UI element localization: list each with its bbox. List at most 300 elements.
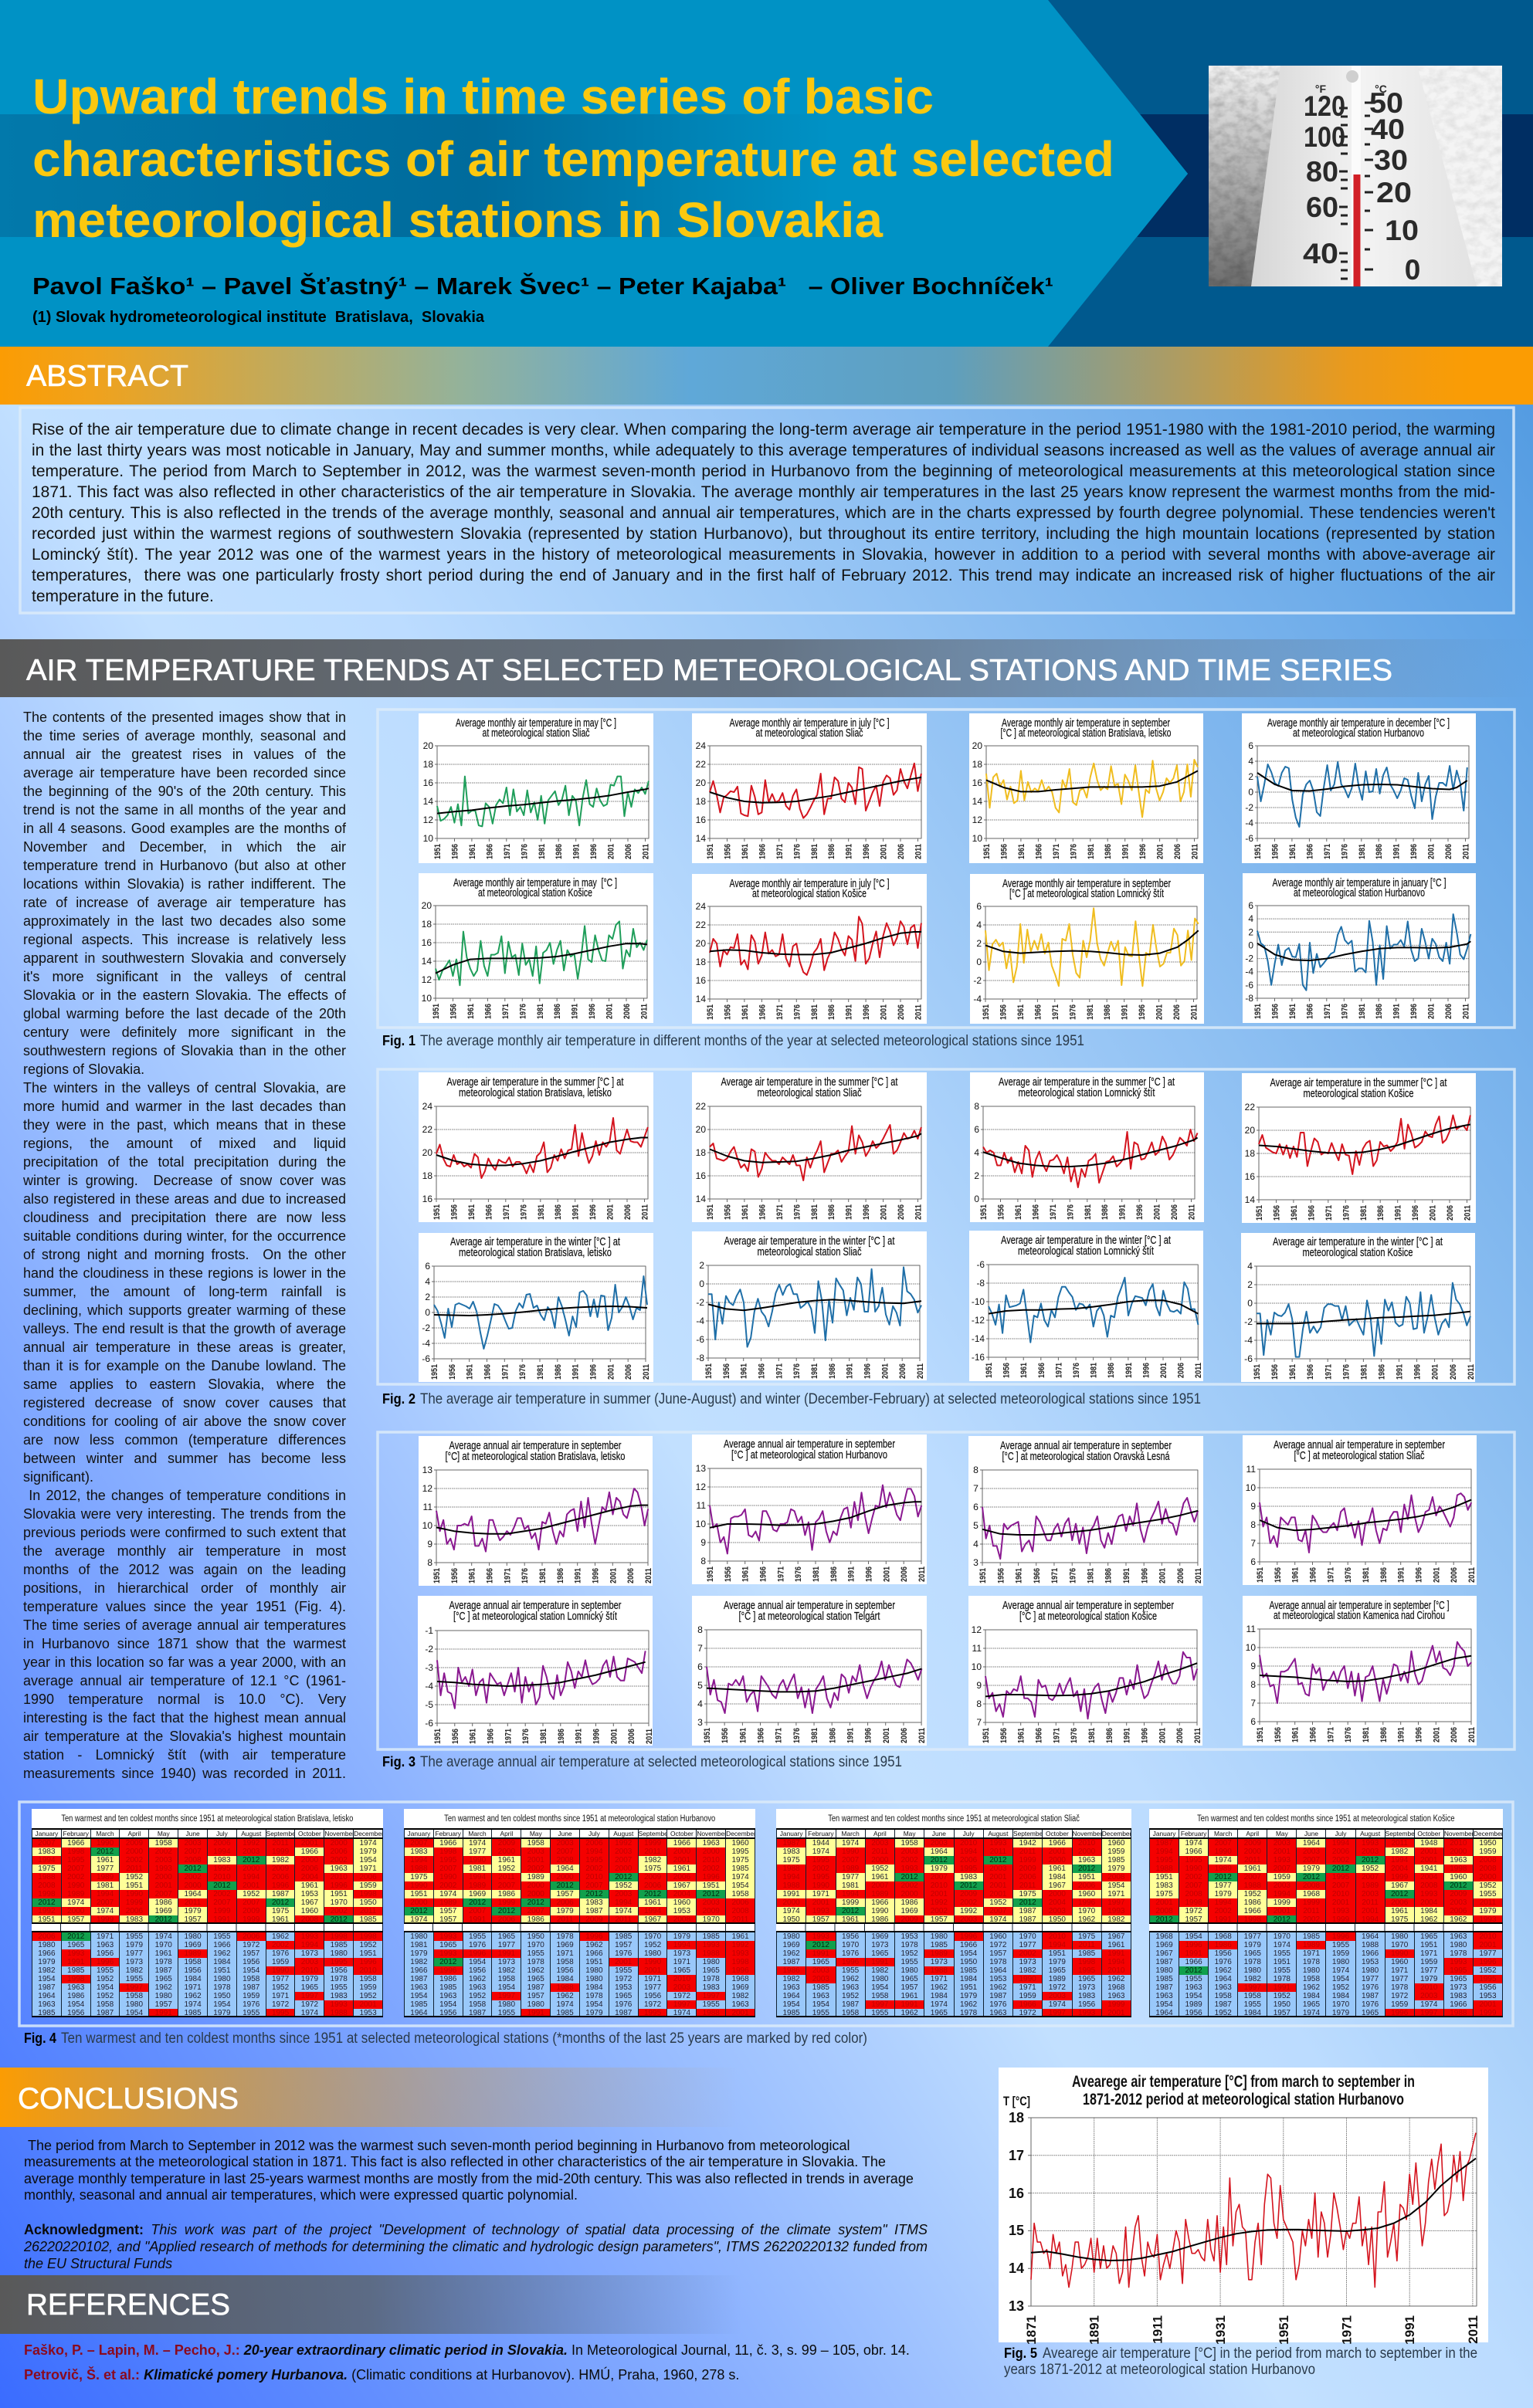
table: Hurbanovo: 1995 (439, 1856, 456, 1864)
table: Hurbanovo: 2008 (731, 1907, 749, 1915)
table: Kosice: 2004 (1391, 1864, 1408, 1873)
chart: annual Oravska Lesna: 3 (973, 1557, 978, 1568)
table: Bratislava, letisko: 1980 (155, 1992, 172, 2000)
table: Kosice: 1959 (1391, 2000, 1408, 2009)
table: Kosice: 1979 (1479, 1907, 1497, 1915)
table: Kosice: 1958 (1303, 1975, 1320, 1983)
table: Kosice: 1955 (1332, 1941, 1349, 1949)
table: Bratislava, letisko: 1955 (97, 1966, 114, 1975)
left column text: the average monthly air temperature in most (23, 1543, 346, 1559)
table: Sliac: 1958 (900, 1839, 918, 1847)
table: Kosice: February (1181, 1830, 1206, 1837)
table: Sliac: 2003 (871, 1839, 888, 1847)
chart: January Hurbanovo: at meteorological station Hurbanovo (1294, 886, 1425, 899)
table: Hurbanovo: 2000 (615, 1864, 632, 1873)
table: Sliac: 1991 (812, 1949, 829, 1958)
table: Kosice: 1954 (1185, 1932, 1202, 1941)
table: Hurbanovo: 2009 (703, 1907, 720, 1915)
chart: September Lomnicky stit: 0 (976, 957, 982, 967)
chart: winter Sliac: -4 (696, 1316, 704, 1326)
table: Bratislava, letisko: 2007 (67, 1864, 84, 1873)
table: Sliac: 2003 (931, 1839, 948, 1847)
table: Hurbanovo: 1998 (439, 1847, 456, 1856)
chart: January Hurbanovo: 6 (1248, 900, 1253, 911)
table: Kosice: 1978 (1303, 1958, 1320, 1966)
table: Kosice: 1970 (1332, 2000, 1349, 2009)
table: Hurbanovo: 1985 (410, 2000, 428, 2009)
table: Kosice: 2012 (1362, 1856, 1379, 1864)
table: Bratislava, letisko: 1956 (184, 1966, 202, 1975)
table: Bratislava, letisko: 1956 (67, 2009, 84, 2017)
header background (0, 0, 1533, 347)
table: Bratislava, letisko: 1954 (359, 1856, 377, 1864)
table: Kosice: 1978 (1244, 1958, 1261, 1966)
chart: annual Sliac: [°C ] at meteorological station Sliač (1294, 1449, 1425, 1462)
table: Hurbanovo: June (558, 1830, 572, 1837)
table: Hurbanovo: 1993 (731, 1949, 749, 1958)
table: Bratislava, letisko: 1953 (359, 2009, 377, 2017)
table: Sliac: 1966 (1019, 2000, 1036, 2009)
table: Sliac: 1985 (931, 1941, 948, 1949)
table: Sliac: 1976 (989, 2000, 1007, 2009)
table: Bratislava, letisko: 1977 (97, 1864, 114, 1873)
table: Kosice: 1965 (1244, 1949, 1261, 1958)
chart: annual Kosice: [°C ] at meteorological station Košice (1019, 1610, 1157, 1623)
table: Kosice: 1993 (1332, 1907, 1349, 1915)
table: Bratislava, letisko: 1964 (38, 1992, 56, 2000)
left column text: global warming before the last decade of the 20th (23, 1006, 346, 1021)
chart: May Kosice: 20 (422, 900, 432, 911)
chart: annual Oravska Lesna: [°C ] at meteorological station Oravská Lesná (1002, 1450, 1170, 1463)
chart: July Kosice (692, 874, 927, 1024)
table: Sliac: November (1072, 1830, 1102, 1837)
table: Kosice: October (1417, 1830, 1440, 1837)
abstract text: Lomincký štít). The year 2012 was one of the warmest years in the history of meteorological measurements in Slovakia, however in addition to a period with several months with above-average air (32, 546, 1495, 564)
table: Bratislava, letisko: May (158, 1830, 170, 1837)
table: Sliac: 1955 (871, 2009, 888, 2017)
table: Hurbanovo: 1957 (556, 1890, 574, 1898)
table: Sliac: 1990 (812, 1881, 829, 1890)
table: Hurbanovo: 1991 (469, 1915, 486, 1924)
chart: winter Sliac: -8 (696, 1353, 704, 1363)
table: Hurbanovo: 2011 (498, 1873, 515, 1881)
table: Hurbanovo: 1979 (556, 1907, 574, 1915)
table: Hurbanovo: October (670, 1830, 694, 1837)
table: Kosice: May (1276, 1830, 1288, 1837)
table: Hurbanovo: 1965 (527, 1975, 544, 1983)
table: Kosice: 2002 (1332, 1856, 1349, 1864)
table: Bratislava, letisko: 2012 (155, 1915, 172, 1924)
table: Hurbanovo: 2012 (585, 1890, 603, 1898)
table: Kosice: 1975 (1391, 1915, 1408, 1924)
left column text: regional aspects. This increase is relatively less (23, 932, 346, 947)
table: Kosice: 2010 (1420, 1983, 1437, 1992)
table: Bratislava, letisko: 2006 (301, 1864, 318, 1873)
table: Hurbanovo: 1989 (527, 1873, 544, 1881)
table: Hurbanovo: 1955 (498, 2009, 515, 2017)
table: Bratislava, letisko: 1955 (126, 1932, 143, 1941)
table: Bratislava, letisko: 1991 (155, 2009, 172, 2017)
table: Kosice: 1952 (1215, 2009, 1232, 2017)
chart: December Hurbanovo: 0 (1248, 787, 1253, 798)
table: Kosice: 2007 (1215, 1839, 1232, 1847)
abstract text: temperature in the future. (32, 588, 214, 605)
table: Bratislava, letisko: 1979 (38, 1958, 56, 1966)
chart: summer Lomnicky stit (970, 1072, 1204, 1222)
table: Kosice: 1982 (1391, 1847, 1408, 1856)
table: Hurbanovo: 1972 (673, 1992, 690, 2000)
table: Sliac: 1962 (931, 1983, 948, 1992)
table: Sliac: 1978 (900, 1941, 918, 1949)
chart: annual Bratislava: 12 (422, 1483, 432, 1494)
chart: summer Bratislava (419, 1072, 653, 1222)
chart: May Kosice: 12 (422, 974, 432, 985)
chart: winter Bratislava: -2 (422, 1323, 430, 1333)
table: Bratislava, letisko: 2006 (242, 1932, 259, 1941)
table: Kosice: 1983 (1450, 1992, 1467, 2000)
table: Kosice: November (1444, 1830, 1474, 1837)
chart: May Sliac: 14 (423, 796, 433, 807)
chart: September Bratislava: 18 (972, 759, 982, 770)
table: Bratislava, letisko: 1951 (38, 1915, 56, 1924)
table: Bratislava, letisko: 1974 (67, 1898, 84, 1907)
table: Hurbanovo: 1956 (644, 1992, 661, 2000)
table: Bratislava, letisko: 1974 (155, 1932, 172, 1941)
chart: summer Sliac: 22 (696, 1101, 706, 1112)
table: Sliac: 1991 (871, 1958, 888, 1966)
table: Kosice: 1978 (1391, 1983, 1408, 1992)
table: Bratislava, letisko: 1985 (184, 2009, 202, 2017)
table: Bratislava, letisko: 1999 (97, 1915, 114, 1924)
photo: thermometer: 120 (1304, 90, 1345, 122)
table: Hurbanovo: 1988 (703, 1949, 720, 1958)
table: Bratislava, letisko: 1957 (184, 1915, 202, 1924)
table: Hurbanovo: 1970 (527, 1941, 544, 1949)
table: Sliac: 1996 (1078, 1898, 1095, 1907)
table: Sliac: 1952 (900, 1949, 918, 1958)
table: Bratislava, letisko: 1950 (213, 1992, 231, 2000)
table: Kosice: 1948 (1420, 1839, 1437, 1847)
table: Hurbanovo: 1980 (585, 1966, 603, 1975)
table: Sliac: 1994 (842, 1890, 859, 1898)
caption: figure 4: Ten warmest and ten coldest months since 1951 at selected meteorological stations (*months of the last 25 years are marked by red color) (61, 2030, 867, 2047)
table: Bratislava, letisko: June (185, 1830, 200, 1837)
table: Bratislava, letisko: 1952 (97, 1975, 114, 1983)
table: Kosice: 1990 (1215, 1847, 1232, 1856)
table: Kosice: 1977 (1479, 1949, 1497, 1958)
table: Kosice: 1994 (1362, 1915, 1379, 1924)
table: Kosice: 1982 (1244, 1975, 1261, 1983)
table: Kosice: 2002 (1185, 1873, 1202, 1881)
table: Bratislava, letisko: 2001 (155, 1881, 172, 1890)
caption: figure 4: Fig. 4 (24, 2030, 56, 2046)
table: Kosice: 2012 (1185, 1966, 1202, 1975)
table: Hurbanovo: 1963 (731, 2000, 749, 2009)
table: Sliac: 1952 (989, 1898, 1007, 1907)
left column text: Slovakia were very interesting. The trends from the (23, 1506, 346, 1522)
chart: summer Lomnicky stit: 8 (974, 1101, 979, 1112)
table: Sliac: 2006 (1019, 1873, 1036, 1881)
table: Kosice: 1989 (1303, 1941, 1320, 1949)
table: Kosice: 1998 (1244, 1915, 1261, 1924)
table: Kosice: 1991 (1274, 1983, 1291, 1992)
table: Sliac: 1993 (812, 1907, 829, 1915)
table: Bratislava, letisko: 2008 (184, 1856, 202, 1864)
table: Sliac: 1995 (812, 1856, 829, 1864)
table: Hurbanovo: 1961 (673, 1864, 690, 1873)
table: Hurbanovo: 1956 (439, 2009, 456, 2017)
table: Kosice: 1995 (1450, 1966, 1467, 1975)
title: meteorological stations in Slovakia (32, 192, 883, 248)
table: Sliac: 2000 (783, 1898, 800, 1907)
table: Hurbanovo: 1958 (556, 1958, 574, 1966)
table: Kosice: 1958 (1244, 1992, 1261, 2000)
chart: May Kosice: 10 (422, 993, 432, 1004)
table: Sliac: 1944 (812, 1839, 829, 1847)
table: Sliac: 1980 (783, 1932, 800, 1941)
abstract text: Rise of the air temperature due to climate change in recent decades is very clear. When comparing the long-term average air temperature in the period 1951-1980 with the 1981-2010 period, the warming (32, 421, 1495, 439)
table: Bratislava, letisko: 1996 (272, 1881, 289, 1890)
table: Sliac: 2001 (989, 1890, 1007, 1898)
table: Kosice: 1984 (1303, 1992, 1320, 2000)
table: Bratislava, letisko: 1991 (67, 1958, 84, 1966)
table: Bratislava, letisko: 1990 (67, 1881, 84, 1890)
table: Bratislava, letisko: 2012 (97, 1847, 114, 1856)
table: Kosice: 1980 (1362, 1966, 1379, 1975)
chart: annual Lomnicky stit: -3 (425, 1662, 433, 1673)
table: Bratislava, letisko: 1974 (359, 1839, 377, 1847)
table: Kosice: 1960 (1450, 1873, 1467, 1881)
table: Kosice: 1989 (1185, 2000, 1202, 2009)
table: Sliac: 1991 (783, 1890, 800, 1898)
table: Kosice: 2007 (1244, 1873, 1261, 1881)
table: Bratislava, letisko: 1996 (359, 1958, 377, 1966)
table: Kosice: 2001 (1420, 1847, 1437, 1856)
table: Kosice: 1956 (1215, 1949, 1232, 1958)
photo: thermometer: 60 (1306, 191, 1338, 223)
table: Kosice: 1959 (1332, 1949, 1349, 1958)
left column text: winter is growing. Decrease of snow cover was (23, 1173, 346, 1188)
table: Kosice: 1975 (1155, 1890, 1173, 1898)
table: Sliac: 2000 (1078, 1847, 1095, 1856)
left column text: the beginning of the 90's of the 20th century. This (23, 784, 346, 799)
table: Hurbanovo: 1961 (644, 1898, 661, 1907)
table: Bratislava, letisko: 1982 (126, 1966, 143, 1975)
table: Kosice: 1955 (1185, 1975, 1202, 1983)
table: Hurbanovo: 1957 (527, 1992, 544, 2000)
table: Sliac: 1973 (1078, 1983, 1095, 1992)
table: Bratislava, letisko: 1966 (38, 1949, 56, 1958)
chart: July Sliac: 16 (696, 815, 706, 825)
table: Bratislava, letisko: 1985 (67, 1966, 84, 1975)
chart: summer Bratislava: meteorological station Bratislava, letisko (459, 1086, 612, 1099)
table: Hurbanovo: 1963 (439, 1992, 456, 2000)
chart: May Sliac: 12 (423, 815, 433, 825)
table: Sliac: 1942 (1019, 1839, 1036, 1847)
table: Kosice: 1987 (1155, 1839, 1173, 1847)
table: Hurbanovo: 2010 (673, 1975, 690, 1983)
table: Bratislava, letisko: 2000 (184, 1881, 202, 1890)
table: Hurbanovo: 1986 (527, 1915, 544, 1924)
table: Hurbanovo: 1979 (585, 2009, 603, 2017)
left column text: century were definitely more significant in the (23, 1025, 346, 1040)
table: Sliac: 1963 (783, 1983, 800, 1992)
table: Sliac: 1954 (812, 2000, 829, 2009)
table: Bratislava, letisko: 1999 (213, 1907, 231, 1915)
chart: March-September Hurbanovo 1871-2012: 16 (1009, 2186, 1024, 2201)
table: Hurbanovo: 2003 (527, 1847, 544, 1856)
chart: summer Bratislava: 22 (422, 1124, 432, 1135)
table: Bratislava, letisko: 1963 (97, 1941, 114, 1949)
table: Sliac: 1984 (1049, 1873, 1066, 1881)
table: Hurbanovo: 1997 (703, 1992, 720, 2000)
left column text: The contents of the presented images show that in (23, 710, 346, 725)
table: Hurbanovo: 1979 (410, 1949, 428, 1958)
table: Sliac: 2003 (960, 1915, 977, 1924)
table: Sliac: 1993 (900, 1864, 918, 1873)
table: Sliac: 1963 (1078, 1856, 1095, 1864)
chart: winter Sliac: Average air temperature in the winter [°C ] at (724, 1234, 895, 1248)
table: Sliac: 2001 (1107, 2009, 1124, 2017)
chart: January Hurbanovo: -8 (1245, 993, 1253, 1004)
table: Sliac: 1986 (871, 1915, 888, 1924)
table: Bratislava, letisko: 2001 (359, 2000, 377, 2009)
table: Hurbanovo: 1954 (731, 1881, 749, 1890)
chart: September Bratislava (969, 713, 1203, 863)
table: Bratislava, letisko: 1970 (155, 1941, 172, 1949)
table: Kosice: 1964 (1303, 1839, 1320, 1847)
table: Sliac: 2009 (960, 1890, 977, 1898)
table: Sliac: 1983 (960, 1873, 977, 1881)
chart: annual Kamenica nad Cirohou: 7 (1250, 1698, 1256, 1709)
table: Sliac: 1999 (1019, 1856, 1036, 1864)
table: Kosice: July (1335, 1830, 1346, 1837)
chart: July Kosice: at meteorological station Košice (752, 887, 867, 900)
table: Hurbanovo: 2009 (585, 1915, 603, 1924)
table: Bratislava, letisko: 2011 (272, 1839, 289, 1847)
table: Hurbanovo: 1988 (703, 2009, 720, 2017)
chart: summer Kosice: 16 (1245, 1171, 1255, 1182)
table: Hurbanovo: 1985 (439, 1983, 456, 1992)
photo: thermometer: 20 (1376, 177, 1412, 208)
table: Sliac: 1987 (1019, 1915, 1036, 1924)
table: Bratislava, letisko: 2009 (242, 1907, 259, 1915)
chart: annual Kamenica nad Cirohou: Average annual air temperature in september [°C ] (1270, 1599, 1449, 1612)
table: Sliac: 2012 (812, 1941, 829, 1949)
title: characteristics of air temperature at selected (32, 131, 1114, 187)
table: Kosice: 1968 (1303, 1890, 1320, 1898)
caption: figure 1: Fig. 1 (382, 1033, 415, 1048)
table: Kosice: 2006 (1391, 1898, 1408, 1907)
chart: annual Hurbanovo: 13 (696, 1463, 706, 1474)
table: Sliac: 1954 (1107, 1881, 1124, 1890)
table: Kosice: 1974 (1274, 1941, 1291, 1949)
table: Kosice: 1966 (1362, 1949, 1379, 1958)
photo: thermometer: 30 (1374, 144, 1408, 176)
table: Bratislava, letisko: 1986 (155, 1898, 172, 1907)
chart: September Bratislava: 14 (972, 796, 982, 807)
table: Hurbanovo: 1996 (469, 1949, 486, 1958)
table: Sliac: 1962 (989, 1983, 1007, 1992)
chart: winter Sliac (692, 1231, 927, 1380)
table: Kosice: 1999 (1332, 1915, 1349, 1924)
table: Hurbanovo: 1965 (703, 1966, 720, 1975)
table: Kosice: 2001 (1155, 1898, 1173, 1907)
left column text: In 2012, the changes of temperature conditions in (29, 1488, 346, 1503)
table: Sliac: 1958 (871, 1992, 888, 2000)
panel: figure 3 (378, 1432, 1514, 1749)
table: Kosice: 2001 (1362, 1907, 1379, 1915)
table: Sliac: 1978 (989, 1958, 1007, 1966)
table: Hurbanovo: 2012 (410, 1907, 428, 1915)
table: Bratislava, letisko: 1959 (359, 1881, 377, 1890)
table: Sliac: 1966 (960, 1941, 977, 1949)
table: Bratislava, letisko: 1993 (155, 1864, 172, 1873)
table: Kosice: 1955 (1479, 1890, 1497, 1898)
table: Sliac: 1977 (842, 1873, 859, 1881)
table: Bratislava, letisko: 1979 (126, 1941, 143, 1949)
chart: annual Kosice: 10 (972, 1661, 982, 1672)
left column text: year in this location so far was a year 2000, with an (23, 1654, 346, 1670)
chart: annual Hurbanovo: 12 (696, 1482, 706, 1492)
table: Kosice: 2003 (1303, 1847, 1320, 1856)
table: Sliac: 1994 (1107, 1958, 1124, 1966)
table: Bratislava, letisko: 1954 (242, 1966, 259, 1975)
left column text: rate of increase of average air temperature has (23, 895, 346, 910)
table: Hurbanovo: July (588, 1830, 600, 1837)
table: Bratislava, letisko: 1969 (184, 1941, 202, 1949)
table: Kosice: 2012 (1450, 1881, 1467, 1890)
table: Hurbanovo: 1993 (439, 1932, 456, 1941)
table: Sliac: 2001 (989, 1873, 1007, 1881)
chart: annual Hurbanovo: 8 (700, 1556, 706, 1566)
chart: July Kosice: 22 (696, 920, 706, 930)
table: Bratislava, letisko: 1962 (272, 1932, 289, 1941)
table: Bratislava, letisko: 1980 (126, 2000, 143, 2009)
chart: annual Bratislava: 10 (422, 1520, 432, 1531)
table: Kosice: 1993 (1420, 1890, 1437, 1898)
chart: September Bratislava: 20 (972, 740, 982, 751)
table: Bratislava, letisko: 2007 (155, 1890, 172, 1898)
table: Hurbanovo: 2004 (673, 1890, 690, 1898)
table: Bratislava, letisko: 1958 (359, 1975, 377, 1983)
chart: winter Sliac: 0 (699, 1279, 704, 1289)
chart: winter Lomnicky stit: -8 (976, 1278, 985, 1289)
table: Hurbanovo: 1982 (731, 1992, 749, 2000)
table: Kosice: 2011 (1303, 1907, 1320, 1915)
table: Sliac: 1995 (1078, 1966, 1095, 1975)
table: Hurbanovo: 1964 (410, 2009, 428, 2017)
table: Bratislava, letisko: 1958 (97, 2000, 114, 2009)
table: Kosice: 2008 (1155, 1907, 1173, 1915)
left column text: air temperature at the Slovakia's highest mountain (23, 1729, 346, 1744)
left column text: also registered in these areas and due to increased (23, 1191, 346, 1207)
table: Kosice: 1979 (1332, 2009, 1349, 2017)
table: Hurbanovo: 1994 (469, 1873, 486, 1881)
table: Bratislava, letisko: 1999 (272, 1847, 289, 1856)
table: Kosice: 2008 (1303, 1881, 1320, 1890)
caption: figure 1: The average monthly air temperature in different months of the year at selected meteorological stations since 1951 (420, 1033, 1084, 1049)
table: Bratislava, letisko: 1955 (242, 2009, 259, 2017)
table: Kosice: 1994 (1155, 1847, 1173, 1856)
table: Sliac: 1979 (1049, 1958, 1066, 1966)
table: Bratislava, letisko: 1997 (126, 1983, 143, 1992)
table: Sliac: 1982 (1019, 1966, 1036, 1975)
table: Kosice: 1980 (1391, 1932, 1408, 1941)
table: Hurbanovo: 1973 (673, 1949, 690, 1958)
table: Sliac: 1978 (960, 2009, 977, 2017)
table: Hurbanovo: 2007 (585, 1881, 603, 1890)
